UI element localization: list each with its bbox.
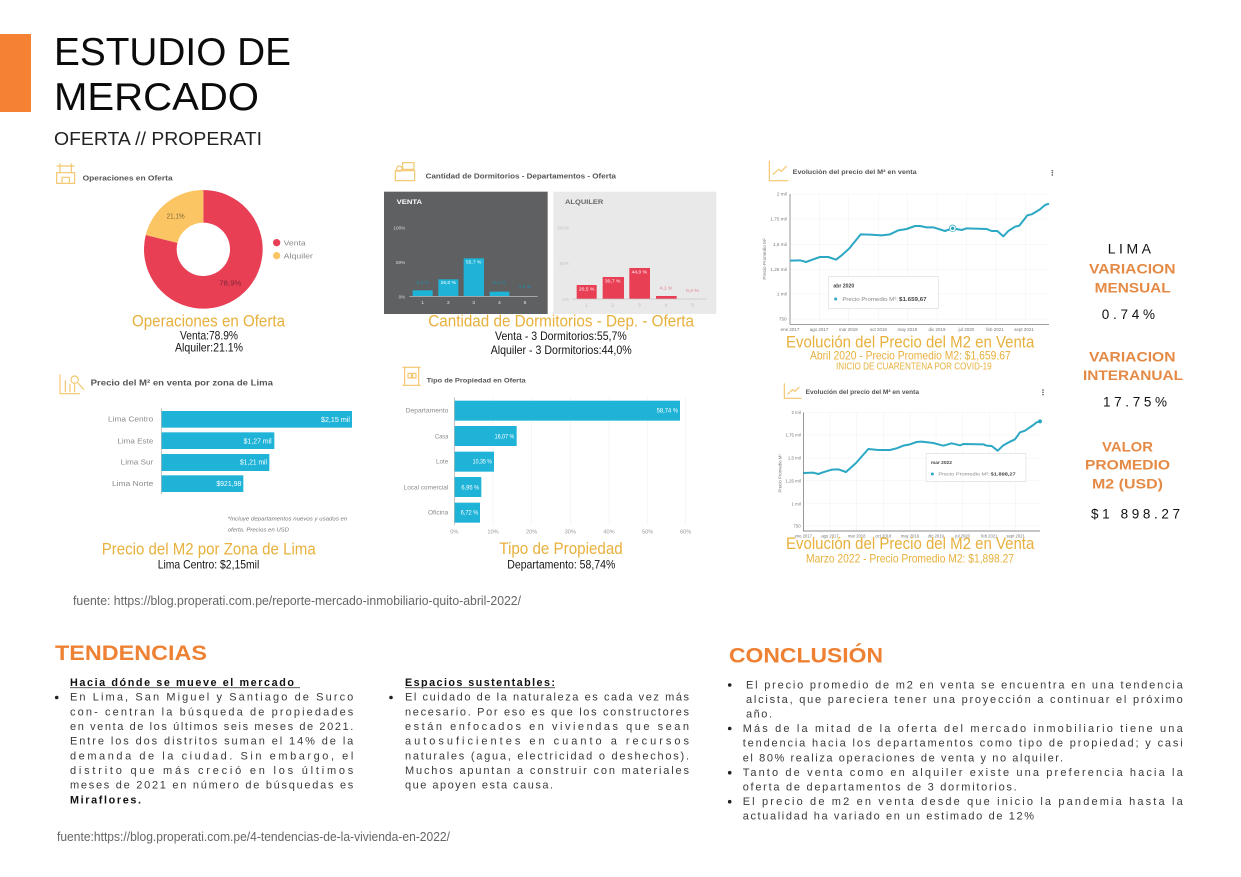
bar charts venta and alquiler: 1 <box>421 300 424 306</box>
line chart: Precio Promedio M²: <box>938 472 990 477</box>
line chart: ago 2017 <box>810 327 829 332</box>
caption: INICIO DE CUARENTENA POR COVID-19 <box>836 362 992 373</box>
text block: hacia donde se mueve el mercado: Miraflores. <box>70 794 141 806</box>
line chart: 1,25 mil <box>786 478 801 483</box>
line chart: may 2019 <box>901 533 920 538</box>
line chart: oct 2018 <box>870 327 887 332</box>
line chart <box>778 383 1044 538</box>
valor promedio: M2 (USD) <box>1092 475 1163 491</box>
bar charts venta and alquiler: 100% <box>557 225 569 230</box>
panel: evolucion precio marzo 2022 <box>778 383 1044 565</box>
caption <box>132 313 286 354</box>
horizontal bar chart: 10% <box>487 530 499 536</box>
bar charts venta and alquiler: 44,0 % <box>632 270 648 276</box>
caption: Marzo 2022 - Precio Promedio M2: $1,898.27 <box>806 551 1014 565</box>
horizontal bar chart: *Incluye departamentos nuevos y usados en <box>228 517 347 523</box>
valor promedio: PROMEDIO <box>1085 456 1170 472</box>
caption: Abril 2020 - Precio Promedio M2: $1,659.67 <box>810 348 1011 362</box>
bar charts venta and alquiler: Cantidad de Dormitorios - Departamentos - Oferta <box>426 174 616 181</box>
caption: Departamento: 58,74% <box>507 557 616 571</box>
horizontal bar chart: $921,98 <box>216 481 241 488</box>
horizontal bar chart: 16,07 % <box>495 434 515 440</box>
horizontal bar chart: 6,72 % <box>461 511 479 517</box>
bar charts venta and alquiler: 0,4 % <box>686 288 699 294</box>
bar charts venta and alquiler: VENTA <box>397 199 423 206</box>
line chart: ene 2017 <box>795 533 813 538</box>
caption <box>786 333 1035 373</box>
caption <box>102 540 316 571</box>
bar charts venta and alquiler: 26,0 % <box>441 280 457 286</box>
caption: Evolución del Precio del M2 en Venta <box>786 333 1035 351</box>
panel: tipo de propiedad <box>402 367 691 571</box>
line chart: 750 <box>779 317 787 322</box>
variacion mensual: VARIACION <box>1089 260 1176 276</box>
bar charts venta and alquiler: 4 <box>498 300 501 306</box>
variacion interanual <box>1083 348 1183 410</box>
panel: cantidad de dormitorios <box>384 163 716 357</box>
bar charts venta and alquiler: 0% <box>562 297 569 302</box>
text block: hacia donde se mueve el mercado <box>55 677 354 806</box>
subtitle: OFERTA // PROPERATI <box>54 129 262 149</box>
donut chart: Venta <box>284 238 307 247</box>
heading conclusion: CONCLUSIÓN <box>729 643 883 667</box>
horizontal bar chart: 10,35 % <box>473 460 493 466</box>
bar charts venta and alquiler <box>384 163 716 314</box>
line chart: Evolución del precio del M² en venta <box>806 389 920 396</box>
caption <box>499 540 623 571</box>
text block: conclusion: actualidad ha variado en un estimado de 12% <box>743 810 1034 822</box>
horizontal bar chart: 40% <box>603 530 615 536</box>
text block: espacios sustentables: autosuficientes en cuanto a recursos <box>405 736 690 748</box>
variacion interanual: 17.75% <box>1103 395 1167 410</box>
line chart: Precio Promedio M²: <box>842 297 898 303</box>
line chart: jul 2020 <box>954 533 971 538</box>
variacion mensual <box>1089 260 1176 322</box>
text block: espacios sustentables: necesario. Por eso es que los constructores <box>405 706 690 718</box>
horizontal bar chart: 6,95 % <box>461 485 480 491</box>
valor promedio: $1 898.27 <box>1091 506 1180 521</box>
horizontal bar chart: 20% <box>526 530 537 536</box>
caption: Operaciones en Oferta <box>132 313 286 331</box>
bar charts venta and alquiler: 5 <box>524 300 527 306</box>
horizontal bar chart: 50% <box>642 530 653 536</box>
text block: espacios sustentables: El cuidado de la naturaleza es cada vez más <box>405 692 690 704</box>
bar charts venta and alquiler: 1,0 % <box>519 284 532 290</box>
line chart: dic 2019 <box>929 327 946 332</box>
text block: hacia donde se mueve el mercado: Entre los dos distritos suman el 14% de la <box>70 736 354 748</box>
horizontal bar chart: 0% <box>450 530 458 536</box>
panel: precio por zona <box>60 374 352 571</box>
horizontal bar chart <box>60 374 352 533</box>
donut chart: Alquiler <box>284 251 314 260</box>
bar charts venta and alquiler: 2 <box>447 300 450 306</box>
line chart: ene 2017 <box>781 327 800 332</box>
accent block <box>0 34 31 112</box>
horizontal bar chart: $2,15 mil <box>321 417 350 424</box>
horizontal bar chart: Lima Norte <box>112 479 153 488</box>
caption: Alquiler - 3 Dormitorios:44,0% <box>491 343 632 357</box>
line chart: abr 2020 <box>833 284 854 290</box>
donut chart: Operaciones en Oferta <box>83 176 173 183</box>
bar charts venta and alquiler: 9,3 % <box>416 280 430 286</box>
line chart: feb 2021 <box>981 533 998 538</box>
panel: operaciones en oferta <box>57 163 314 354</box>
text block: conclusion: alcista, que pareciera tener una proyección a continuar el próximo <box>746 694 1183 706</box>
line chart: 1,5 mil <box>773 242 787 247</box>
bar charts venta and alquiler: 30,7 % <box>605 279 621 285</box>
bar charts venta and alquiler: 100% <box>393 225 405 230</box>
valor promedio <box>1085 438 1180 521</box>
line chart: jul 2020 <box>957 327 975 332</box>
line chart: dic 2019 <box>928 533 945 538</box>
text block: conclusion: oferta de departamentos de 3 dormitorios. <box>743 782 1017 794</box>
line chart: oct 2018 <box>875 533 892 538</box>
lima heading: LIMA <box>1108 240 1152 256</box>
line chart: 1,25 mil <box>770 267 787 272</box>
variacion interanual: VARIACION <box>1089 348 1176 364</box>
title: MERCADO <box>54 76 259 119</box>
panel: evolucion precio abril 2020 <box>762 161 1053 373</box>
title <box>54 31 291 119</box>
text block: espacios sustentables: Muchos apuntan a construir con materiales <box>405 765 690 777</box>
horizontal bar chart: 30% <box>565 530 576 536</box>
caption: Cantidad de Dormitorios - Dep. - Oferta <box>428 313 695 331</box>
line chart: sept 2021 <box>1007 533 1025 538</box>
bar charts venta and alquiler: 4 <box>665 303 668 309</box>
panel: indicadores lima <box>1083 240 1183 521</box>
horizontal bar chart: Casa <box>435 433 449 440</box>
text block: conclusion <box>728 679 1184 822</box>
horizontal bar chart: Lote <box>436 459 449 466</box>
line chart: may 2019 <box>897 327 918 332</box>
horizontal bar chart: 58,74 % <box>657 409 679 415</box>
text block: hacia donde se mueve el mercado: En Lima, San Miguel y Santiago de Surco <box>70 692 353 704</box>
bar charts venta and alquiler: ALQUILER <box>565 199 604 206</box>
bar charts venta and alquiler: 50% <box>396 260 405 265</box>
caption <box>428 313 695 357</box>
text block: hacia donde se mueve el mercado: demanda de la ciudad. Sin embargo, el <box>70 750 353 762</box>
bar charts venta and alquiler: 55,7 % <box>466 259 482 265</box>
line chart: sept 2021 <box>1014 327 1034 332</box>
bar charts venta and alquiler: 0% <box>399 294 405 299</box>
source link tendencias: fuente:https://blog.properati.com.pe/4-tendencias-de-la-vivienda-en-2022/ <box>57 830 450 844</box>
horizontal bar chart: Lima Este <box>117 436 153 445</box>
bar charts venta and alquiler: 1 <box>585 303 588 309</box>
donut chart: 21,1% <box>167 213 185 220</box>
horizontal bar chart: Lima Centro <box>108 415 153 424</box>
text block: conclusion: año. <box>746 709 772 721</box>
horizontal bar chart: Departamento <box>406 408 449 415</box>
line chart: feb 2021 <box>986 327 1004 332</box>
bar charts venta and alquiler: 20,5 % <box>579 286 595 292</box>
line chart: 1 mil <box>777 292 787 297</box>
line chart: 1,75 mil <box>786 433 801 438</box>
line chart: 1,75 mil <box>770 217 787 222</box>
horizontal bar chart: Precio del M² en venta por zona de Lima <box>91 378 273 388</box>
horizontal bar chart: oferta. Precios en USD <box>228 527 289 533</box>
line chart: Precio Promedio M² <box>778 454 783 492</box>
line chart: Evolución del precio del M² en venta <box>793 169 917 176</box>
caption: Tipo de Propiedad <box>499 540 623 558</box>
horizontal bar chart: 60% <box>680 530 691 536</box>
line chart: 750 <box>793 524 801 529</box>
variacion mensual: MENSUAL <box>1095 279 1171 295</box>
text block: conclusion: el 80% realiza operaciones de venta y no alquiler. <box>743 752 1063 764</box>
text block: hacia donde se mueve el mercado: Hacia dónde se mueve el mercado <box>70 677 294 689</box>
bar charts venta and alquiler: 3 <box>638 303 641 309</box>
line chart: 1,5 mil <box>788 456 801 461</box>
bar charts venta and alquiler: 3 <box>472 300 475 306</box>
caption: Lima Centro: $2,15mil <box>158 557 259 571</box>
donut chart: 78,9% <box>219 280 241 287</box>
text block: espacios sustentables: Espacios sustentables: <box>405 677 555 689</box>
caption: Precio del M2 por Zona de Lima <box>102 540 316 558</box>
horizontal bar chart: Tipo de Propiedad en Oferta <box>427 377 526 384</box>
text block: conclusion: Más de la mitad de la oferta del mercado inmobiliario tiene una <box>743 723 1184 735</box>
donut chart <box>57 163 314 309</box>
horizontal bar chart: Oficina <box>428 510 449 517</box>
line chart: Precio Promedio M² <box>762 238 767 280</box>
line chart: mar 2018 <box>848 533 866 538</box>
line chart: mar 2022 <box>931 460 952 466</box>
text block: espacios sustentables: que apoyen esta causa. <box>405 780 553 792</box>
line chart: $1.898,27 <box>991 472 1016 477</box>
line chart: 1 mil <box>792 501 801 506</box>
text block: espacios sustentables: están enfocados en viviendas que sean <box>405 721 689 733</box>
bar charts venta and alquiler: 5 <box>691 303 694 309</box>
text block: espacios sustentables: naturales (agua, electricidad o deshechos). <box>405 750 689 762</box>
line chart: ago 2017 <box>821 533 839 538</box>
text block: hacia donde se mueve el mercado: distrito que más creció en los últimos <box>70 765 354 777</box>
variacion mensual: 0.74% <box>1102 307 1155 322</box>
line chart: 2 mil <box>777 192 787 197</box>
horizontal bar chart: $1,27 mil <box>244 438 272 445</box>
horizontal bar chart: Lima Sur <box>121 458 154 467</box>
caption: Venta:78.9% <box>180 328 238 342</box>
caption: Evolución del Precio del M2 en Venta <box>786 535 1035 553</box>
line chart: $1.659,67 <box>899 297 927 303</box>
horizontal bar chart <box>402 367 691 536</box>
horizontal bar chart: $1,21 mil <box>240 460 267 467</box>
text block: espacios sustentables <box>389 677 690 792</box>
caption: Alquiler:21.1% <box>175 340 243 354</box>
bar charts venta and alquiler: 50% <box>560 261 569 266</box>
horizontal bar chart: Local comercial <box>404 484 448 491</box>
variacion interanual: INTERANUAL <box>1083 367 1183 383</box>
bar charts venta and alquiler: 2 <box>611 303 614 309</box>
caption: Venta - 3 Dormitorios:55,7% <box>495 329 627 343</box>
text block: conclusion: tendencia hacia los departamentos como tipo de propiedad; y casi <box>743 738 1183 750</box>
line chart <box>762 161 1053 332</box>
text block: hacia donde se mueve el mercado: en venta de los últimos seis meses de 2021. <box>70 721 353 733</box>
source link market report: fuente: https://blog.properati.com.pe/reporte-mercado-inmobiliario-quito-abril-2022/ <box>73 594 522 608</box>
title: ESTUDIO DE <box>54 31 291 74</box>
line chart: mar 2018 <box>839 327 858 332</box>
valor promedio: VALOR <box>1102 438 1153 454</box>
text block: hacia donde se mueve el mercado: meses de 2021 en número de búsquedas es <box>70 780 354 792</box>
heading tendencias: TENDENCIAS <box>55 642 207 665</box>
bar charts venta and alquiler: 4,1 % <box>660 285 673 291</box>
text block: hacia donde se mueve el mercado: con- centran la búsqueda de propiedades <box>70 706 354 718</box>
bar charts venta and alquiler: 8,1 % <box>493 280 506 286</box>
text block: conclusion: El precio de m2 en venta desde que inicio la pandemia hasta la <box>743 796 1184 808</box>
text block: conclusion: Tanto de venta como en alquiler existe una preferencia hacia la <box>743 767 1184 779</box>
line chart: 2 mil <box>792 410 801 415</box>
caption <box>786 535 1035 565</box>
text block: conclusion: El precio promedio de m2 en venta se encuentra en una tendencia <box>746 679 1184 691</box>
